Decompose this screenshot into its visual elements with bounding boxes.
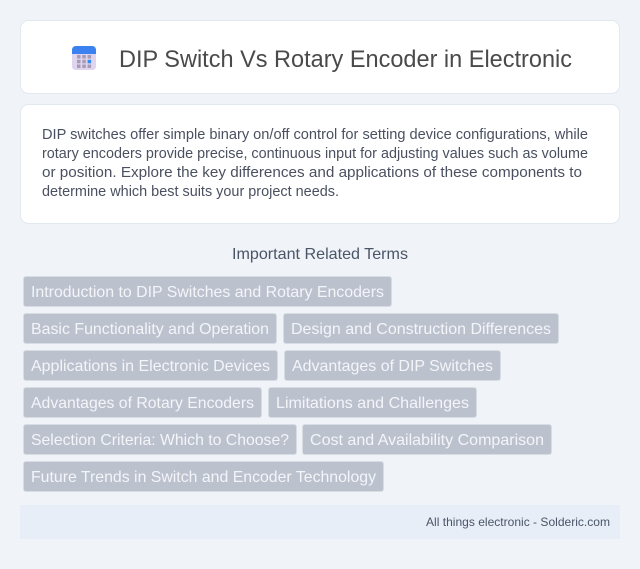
- tag: [24, 462, 384, 492]
- tag: Design and Construction Differences: [291, 321, 551, 338]
- header card: [20, 20, 620, 94]
- tag: [24, 424, 296, 454]
- panel: intro: [20, 104, 620, 224]
- tag: Applications in Electronic Devices: [31, 358, 270, 375]
- tag: [284, 314, 558, 344]
- tag: [24, 350, 278, 380]
- tag: Basic Functionality and Operation: [31, 321, 269, 338]
- tag: Future Trends in Switch and Encoder Technology: [31, 469, 376, 486]
- intro paragraph: [42, 127, 588, 200]
- tag: [24, 388, 262, 418]
- tag: Limitations and Challenges: [276, 395, 469, 412]
- tag: [302, 424, 552, 454]
- footer: All things electronic - Solderic.com: [426, 515, 610, 529]
- tags: [24, 276, 558, 492]
- tag: [284, 350, 500, 380]
- title: DIP Switch Vs Rotary Encoder in Electronic: [119, 46, 572, 73]
- tag: [268, 388, 476, 418]
- intro paragraph: determine which best suits your project needs.: [42, 184, 339, 200]
- tag: Cost and Availability Comparison: [310, 432, 544, 449]
- tag: Selection Criteria: Which to Choose?: [31, 432, 289, 449]
- tag: Advantages of Rotary Encoders: [31, 395, 254, 412]
- intro paragraph: DIP switches offer simple binary on/off control for setting device configurations, while: [42, 127, 588, 143]
- tag: Advantages of DIP Switches: [292, 358, 493, 375]
- tag: Introduction to DIP Switches and Rotary Encoders: [31, 284, 384, 301]
- intro paragraph: or position. Explore the key differences and applications of these components to: [42, 165, 582, 181]
- heading: related terms: Important Related Terms: [232, 246, 408, 263]
- footer: [20, 505, 620, 539]
- tag: [24, 314, 276, 344]
- icon: calendar: [72, 46, 96, 70]
- intro paragraph: rotary encoders provide precise, continuous input for adjusting values such as volume: [42, 146, 588, 162]
- tag: [24, 276, 392, 306]
